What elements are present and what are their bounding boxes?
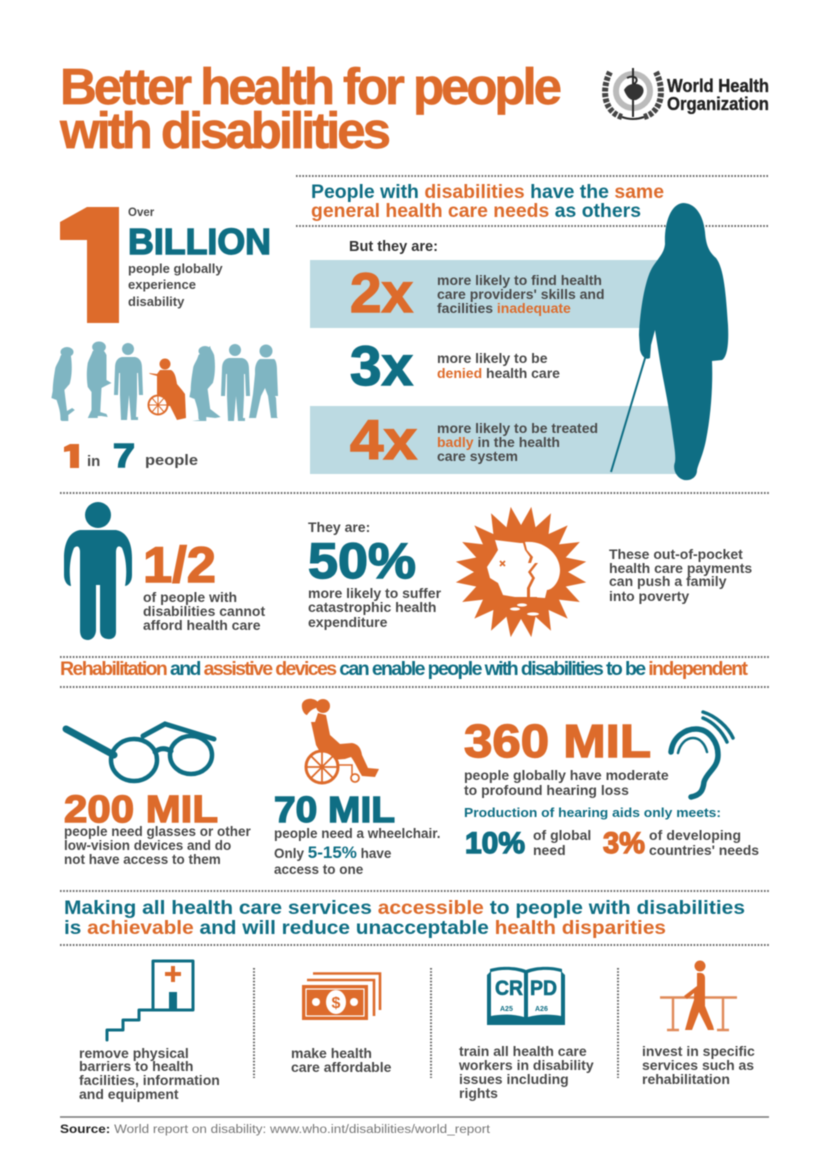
icon: CRPD book: PD — [530, 977, 557, 1000]
panel: 360 million hearing loss — [464, 712, 759, 860]
panel: half cannot afford care — [64, 502, 265, 640]
panel: invest in rehabilitation: services such as — [642, 1057, 754, 1073]
icon: orange person in wheelchair — [148, 358, 186, 420]
panel: train health care workers — [458, 967, 594, 1101]
icon: standing person — [64, 502, 132, 640]
panel: remove physical barriers: barriers to health — [79, 1058, 193, 1074]
panel: 200 million glasses: not have access to them — [64, 852, 221, 867]
text: but they are: But they are: — [349, 239, 438, 255]
icon: CRPD book — [487, 967, 565, 1025]
one in seven: 7 — [113, 437, 135, 474]
heading: same health care needs: People with disabilities have the same — [311, 181, 664, 203]
text: out-of-pocket payments: into poverty — [609, 588, 689, 604]
heading: making services accessible: Making all health care services accessible to people with disabilities — [64, 897, 745, 919]
billion text block: experience — [128, 277, 196, 292]
panel: remove physical barriers: facilities, information — [79, 1072, 220, 1088]
panel: 70 million wheelchair: access to one — [274, 862, 364, 877]
panel: train health care workers: train all health care — [459, 1043, 587, 1059]
panel: 50 percent catastrophic: more likely to suffer — [308, 585, 442, 601]
heading: making services accessible: is achievable and will reduce unacceptable health disparities — [64, 917, 666, 939]
heading: making services accessible — [64, 897, 745, 939]
panel: 200 million glasses: 200 MIL — [64, 789, 218, 831]
source note: Source: World report on disability: www.who.int/disabilities/world_report — [60, 1124, 491, 1136]
icon: child in wheelchair — [302, 699, 379, 783]
panel: 70 million wheelchair: people need a wheelchair. — [274, 826, 441, 841]
panel: 360 million hearing loss: to profound hearing loss — [464, 782, 629, 798]
panel: 360 million hearing loss: 3% — [603, 827, 645, 860]
logo: World Health Organization: World Health — [667, 76, 769, 96]
panel: 3x likelihood: 3x — [350, 334, 413, 397]
panel: 360 million hearing loss: people globally have moderate — [464, 767, 669, 783]
panel: 50 percent catastrophic — [308, 519, 442, 630]
panel: 200 million glasses — [64, 724, 252, 867]
panel: 70 million wheelchair: 70 MIL — [274, 789, 395, 830]
panel: half cannot afford care: afford health care — [143, 617, 261, 633]
panel: half cannot afford care: of people with — [143, 589, 237, 605]
one in seven: in — [87, 453, 100, 470]
icon: row of seven people — [51, 342, 278, 421]
icon: CRPD book: CR — [495, 977, 523, 1000]
panel: invest in rehabilitation: rehabilitation — [642, 1071, 730, 1087]
panel: train health care workers: rights — [459, 1085, 498, 1101]
billion text block: Over — [128, 207, 155, 219]
panel: 2x likelihood: care providers' skills and — [437, 286, 605, 302]
icon: banknotes: $ — [332, 995, 341, 1012]
text: out-of-pocket payments: can push a family — [609, 573, 727, 589]
panel: train health care workers: workers in disability — [458, 1057, 594, 1073]
panel: 360 million hearing loss: of global — [533, 827, 591, 843]
icon: woman with cane silhouette — [611, 203, 728, 480]
panel: 4x likelihood: care system — [437, 448, 518, 464]
panel: 360 million hearing loss: Production of hearing aids only meets: — [464, 805, 721, 820]
panel: make care affordable — [291, 974, 392, 1075]
panel: train health care workers: issues including — [459, 1071, 569, 1087]
panel: 2x likelihood: more likely to find health — [437, 272, 602, 288]
panel: 3x likelihood: more likely to be — [437, 350, 548, 366]
icon: CRPD book: A25 — [500, 1006, 513, 1013]
panel: 360 million hearing loss: 10% — [465, 827, 525, 860]
icon: ear — [671, 712, 733, 797]
panel: remove physical barriers: remove physical — [79, 1045, 189, 1061]
icon: person walking with parallel bars — [660, 960, 737, 1030]
panel: one billion — [60, 207, 271, 323]
panel: 70 million wheelchair — [274, 699, 441, 877]
panel: 360 million hearing loss: countries' needs — [649, 842, 759, 858]
panel: 50 percent catastrophic: expenditure — [308, 614, 388, 630]
panel: invest in rehabilitation — [642, 960, 755, 1087]
text: out-of-pocket payments: health care payments — [609, 560, 752, 576]
billion text block: people globally — [128, 261, 223, 276]
panel: 3x likelihood: denied health care — [437, 365, 560, 381]
icon: hospital with stairs — [107, 961, 193, 1040]
billion text block: BILLION — [128, 221, 271, 262]
panel: remove physical barriers — [79, 961, 220, 1102]
panel: 2x likelihood: 2x — [350, 261, 413, 324]
panel: 4x likelihood — [310, 406, 680, 474]
logo: World Health Organization: Organization — [667, 94, 769, 114]
panel: make care affordable: care affordable — [291, 1059, 392, 1075]
text: out-of-pocket payments: These out-of-pocket — [609, 546, 743, 562]
panel: half cannot afford care: 1/2 — [143, 537, 216, 593]
panel: 3x likelihood — [350, 334, 560, 397]
panel: 360 million hearing loss: 360 MIL — [464, 715, 651, 767]
icon: broken piggy bank in starburst — [454, 505, 588, 639]
heading: same health care needs — [311, 181, 664, 222]
panel: half cannot afford care: disabilities cannot — [143, 603, 265, 619]
text: out-of-pocket payments — [609, 546, 752, 604]
icon: CRPD book: A26 — [535, 1006, 548, 1013]
big numeral 1 — [60, 207, 119, 323]
panel: 4x likelihood: badly in the health — [437, 434, 560, 450]
panel: 2x likelihood: facilities inadequate — [437, 300, 571, 316]
icon: glasses — [66, 724, 214, 781]
heading: rehabilitation and assistive devices: Rehabilitation and assistive devices can enable people with disabilities to be independent — [60, 658, 749, 680]
panel: 70 million wheelchair: Only 5-15% have — [274, 843, 392, 862]
panel: 360 million hearing loss: of developing — [649, 827, 741, 843]
billion text block: disability — [128, 294, 185, 309]
panel: 50 percent catastrophic: catastrophic health — [308, 599, 436, 615]
heading: same health care needs: general health care needs as others — [311, 200, 641, 222]
icon: WHO emblem — [605, 68, 661, 119]
panel: 4x likelihood: more likely to be treated — [437, 420, 598, 436]
title: Better health for people — [60, 58, 562, 115]
billion text block — [128, 207, 271, 309]
panel: make care affordable: make health — [291, 1045, 372, 1061]
one in seven: people — [145, 453, 198, 469]
logo: World Health Organization — [605, 68, 769, 119]
title — [59, 58, 562, 159]
panel: 200 million glasses: people need glasses or other — [64, 824, 252, 839]
panel: 50 percent catastrophic: 50% — [308, 533, 416, 589]
panel: 4x likelihood: 4x — [350, 408, 417, 471]
panel: 50 percent catastrophic: They are: — [308, 519, 370, 535]
panel: remove physical barriers: and equipment — [79, 1086, 179, 1102]
panel: 2x likelihood — [310, 260, 660, 328]
title: with disabilities — [59, 102, 391, 159]
panel: 360 million hearing loss: need — [533, 842, 566, 858]
panel: invest in rehabilitation: invest in specific — [642, 1043, 755, 1059]
panel: 200 million glasses: low-vision devices and do — [64, 838, 231, 853]
one in seven — [64, 437, 198, 474]
